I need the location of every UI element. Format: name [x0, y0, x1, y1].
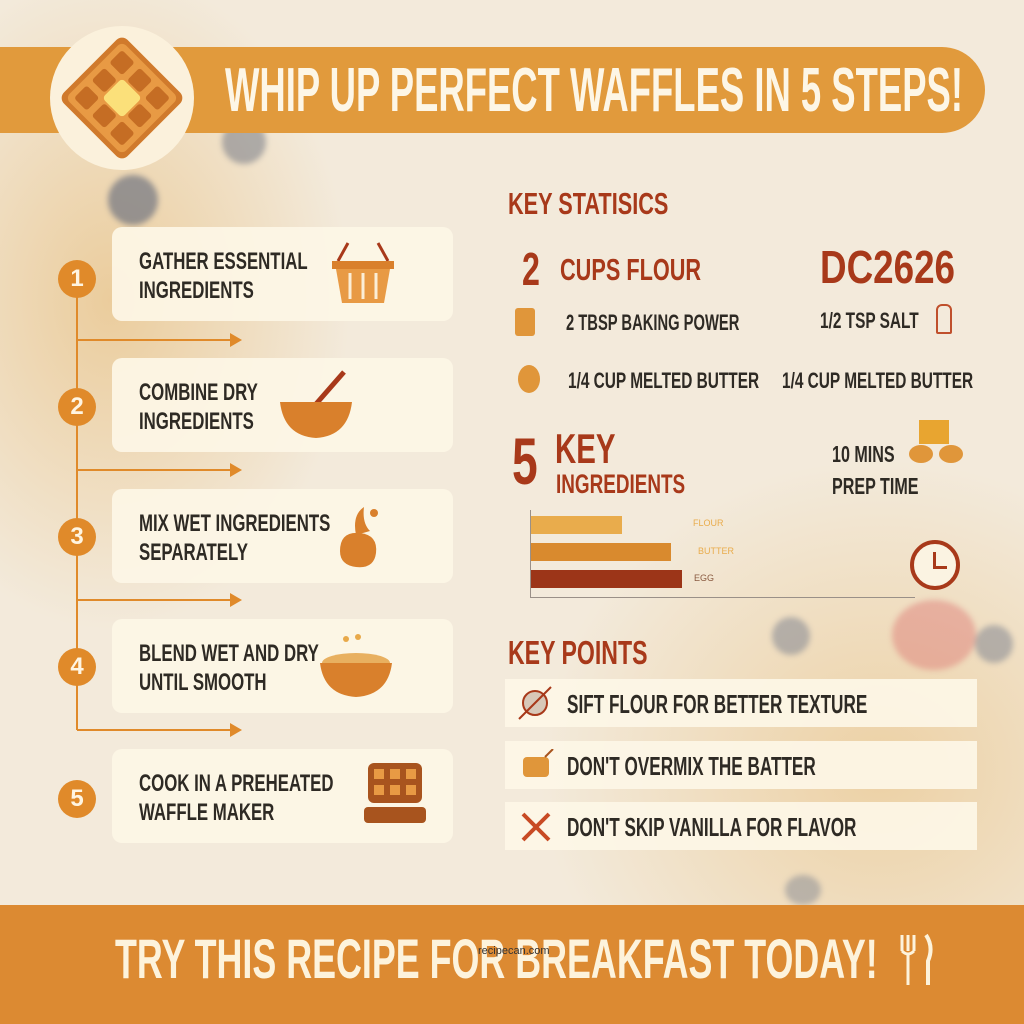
bar chart: EGG: [694, 573, 714, 583]
stat: 2 cups flour: [522, 243, 701, 295]
footer banner: TRY THIS RECIPE FOR BREAKFAST TODAY!: [115, 927, 878, 990]
bar chart: BUTTER: [698, 546, 734, 556]
stat: DC2626: DC2626: [820, 241, 955, 293]
number 5: [58, 780, 96, 818]
icon: salt shaker: [936, 304, 952, 334]
key point 3: [505, 802, 977, 850]
icon: baking powder bag: [515, 308, 535, 336]
key point 1: SIFT FLOUR FOR BETTER TEXTURE: [567, 689, 867, 719]
step 3: [112, 489, 453, 583]
step 3: SEPARATELY: [139, 539, 248, 566]
number 2: 2: [70, 393, 84, 420]
stat: melted butter left: 1/4 CUP MELTED BUTTER: [568, 368, 759, 393]
stat: 5 key ingredients: [512, 424, 685, 499]
step 4: BLEND WET AND DRY: [139, 640, 319, 667]
stat: 2 cups flour: CUPS FLOUR: [560, 252, 701, 287]
number 1: 1: [70, 265, 84, 292]
number 5: 5: [70, 785, 84, 812]
step 2: [112, 358, 453, 452]
key point 1: [505, 679, 977, 727]
step 3: MIX WET INGREDIENTS: [139, 510, 330, 537]
step 5: WAFFLE MAKER: [139, 799, 274, 826]
step 2: COMBINE DRY: [139, 379, 258, 406]
icon: clock: [910, 540, 960, 590]
arrow 2: [77, 469, 240, 471]
title banner: [0, 47, 985, 133]
stat: salt: 1/2 TSP SALT: [820, 308, 919, 333]
stat: baking powder: 2 TBSP BAKING POWER: [566, 310, 739, 335]
stat: 2 cups flour: 2: [522, 243, 540, 295]
number 1: [58, 260, 96, 298]
step 2: INGREDIENTS: [139, 408, 254, 435]
step 1: [112, 227, 453, 321]
key point 2: [505, 741, 977, 789]
step 1: INGREDIENTS: [139, 277, 254, 304]
step 1: GATHER ESSENTIAL: [139, 248, 308, 275]
step 5: [112, 749, 453, 843]
heading: key statistics: KEY STATISICS: [508, 186, 668, 221]
title banner: WHIP UP PERFECT WAFFLES IN 5 STEPS!: [225, 56, 963, 125]
icon: egg: [518, 365, 540, 393]
step 5: COOK IN A PREHEATED: [139, 770, 333, 797]
step 4: [112, 619, 453, 713]
icon: fork and knife: [900, 934, 933, 985]
key point 2: DON'T OVERMIX THE BATTER: [567, 751, 816, 781]
heading: key points: KEY POINTS: [508, 634, 647, 671]
stat: 5 key ingredients: KEY: [555, 425, 615, 472]
stat: prep time: 10 MINS: [832, 441, 895, 467]
timeline line: [76, 285, 78, 730]
number 4: [58, 648, 96, 686]
stat: prep time: [832, 420, 963, 499]
footer banner: recipecan.com: [478, 945, 550, 957]
stat: 5 key ingredients: INGREDIENTS: [556, 469, 685, 499]
bar chart: FLOUR: [693, 518, 724, 528]
number 3: [58, 518, 96, 556]
step 4: UNTIL SMOOTH: [139, 669, 267, 696]
arrow 3: [77, 599, 240, 601]
arrow 4: [77, 729, 240, 731]
stat: melted butter right: 1/4 CUP MELTED BUTTER: [782, 368, 973, 393]
bar chart: [530, 510, 915, 598]
number 2: [58, 388, 96, 426]
key point 3: DON'T SKIP VANILLA FOR FLAVOR: [567, 812, 856, 842]
stat: 5 key ingredients: 5: [512, 424, 538, 498]
stat: prep time: PREP TIME: [832, 473, 918, 499]
number 4: 4: [70, 653, 84, 680]
number 3: 3: [70, 523, 84, 550]
arrow 1: [77, 339, 240, 341]
footer banner: [0, 905, 1024, 1024]
icon: waffle logo: [50, 26, 194, 170]
